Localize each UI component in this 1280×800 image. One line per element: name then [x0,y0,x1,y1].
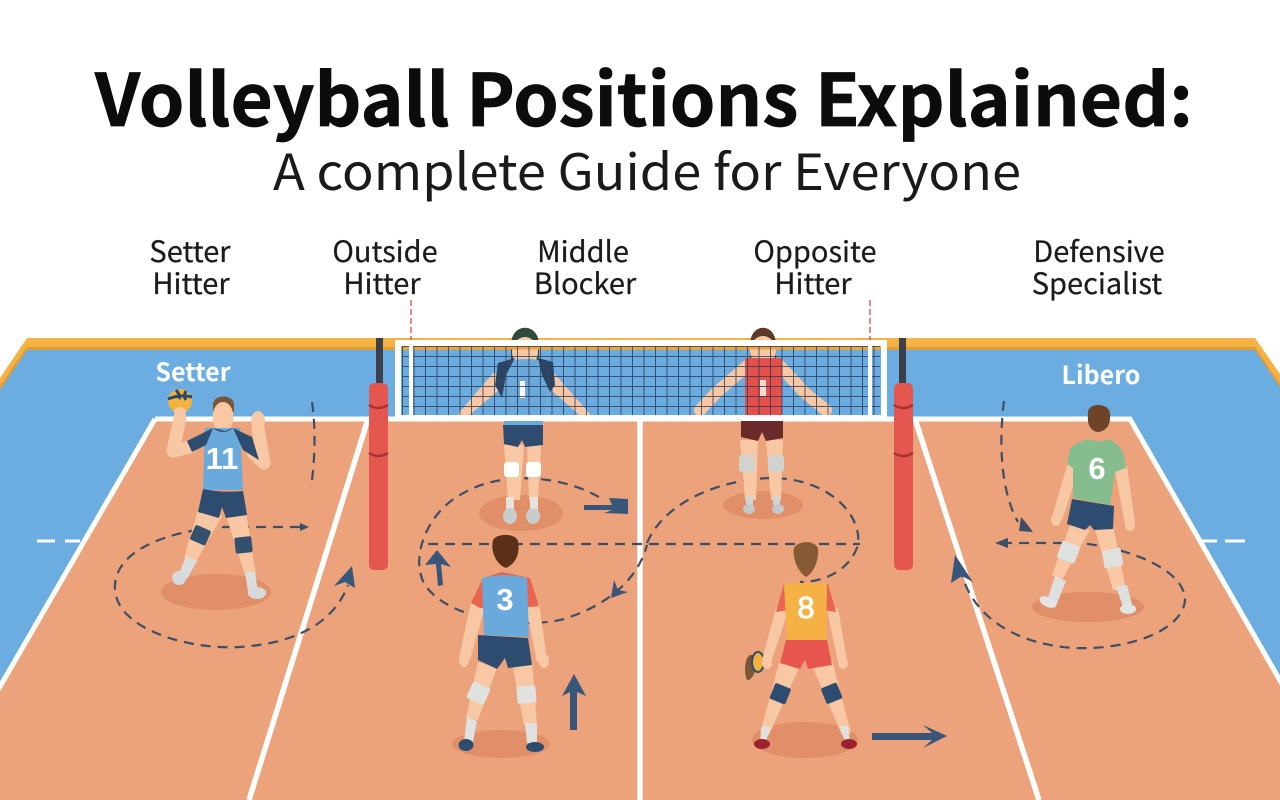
player 5: no. 8: 8 [797,590,815,625]
player 6: libero no. 6 [1038,405,1136,614]
net [398,343,884,418]
player 4: outside hitter no. 3 [458,535,549,752]
movement paths [115,401,1185,648]
arrow: loop down-left [611,580,628,598]
position labels: Middle [537,229,629,271]
title: Volleyball Positions Explained: [94,42,1193,147]
position labels [149,229,1165,303]
player 5: no. 8 [745,542,857,749]
icon: volleyball [168,389,192,417]
position labels: Blocker [534,261,637,303]
label: Libero: Libero [1062,356,1140,392]
label: Setter: Setter [155,353,231,389]
post: right [894,338,913,570]
player 6: libero no. 6: 6 [1088,451,1106,486]
player 1: setter no. 11: 11 [206,441,238,476]
position labels: Opposite [753,229,877,271]
player 3: opposite hitter behind net [700,328,826,514]
arrow: top centre right [584,498,628,514]
position labels: Specialist [1032,261,1162,303]
icon: volleyball held low [745,652,764,680]
arrow: right loop up-left [951,555,973,583]
court [0,330,1280,800]
position labels: Outside [332,229,438,271]
position labels: Defensive [1033,229,1165,271]
player 2: middle blocker behind net [458,328,590,524]
arrow: long right [872,725,947,748]
arrow: tall up [562,674,586,730]
position labels: Hitter [152,261,230,303]
subtitle: A complete Guide for Everyone [273,133,1021,205]
post: left [369,338,388,570]
position labels: Setter [149,229,231,271]
antennas [411,300,870,340]
position labels: Hitter [774,261,852,303]
player 4: outside hitter no. 3: 3 [496,582,514,617]
player 1: setter no. 11 [168,389,266,599]
arrow: small up [425,550,451,586]
shadows under players [161,491,1144,758]
arrow: left loop up-right [334,566,355,588]
position labels: Hitter [343,261,421,303]
